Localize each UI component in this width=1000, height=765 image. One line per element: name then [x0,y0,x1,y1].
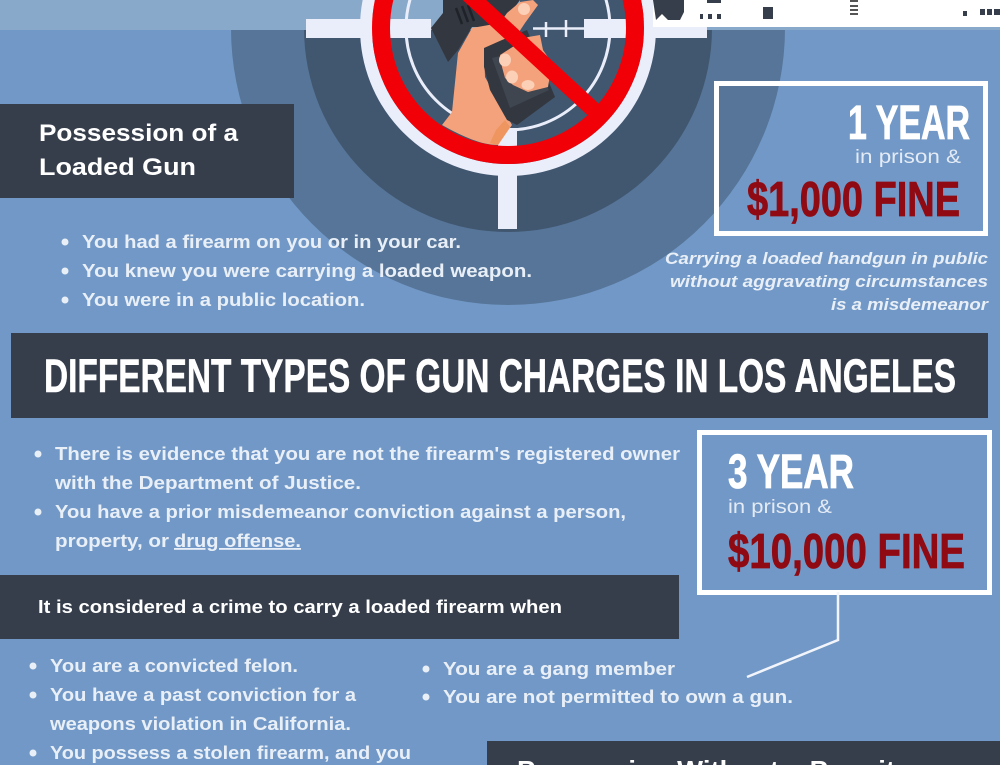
callout: 3 year penalty: in prison & [728,497,832,518]
icon: gun slide [431,0,520,62]
title banner [11,333,988,418]
icon: hand [442,0,538,145]
callout: 1 year penalty: in prison & [855,147,961,168]
callout: 1 year penalty [716,84,986,234]
text block: left conditions list: You are a convicted felon. [50,656,298,676]
panel: possession without a permit [487,741,1000,765]
text block: misdemeanor note: is a misdemeanor [831,295,990,314]
icon: fingers [500,35,552,92]
text block: misdemeanor note [665,249,990,314]
text block: evidence bullets: You have a prior misdemeanor conviction against a person, [55,502,626,522]
top band [0,0,1000,30]
callout: 3 year penalty: 3 YEAR [728,446,854,499]
text block: evidence bullets: drug offense. [174,531,301,551]
icon: wrist shadow [490,120,510,145]
panel: possession of a loaded gun: Loaded Gun [39,154,196,181]
text block: loaded gun bullets: You knew you were carrying a loaded weapon. [82,261,532,281]
text block: left conditions list: weapons violation in California. [49,714,351,734]
text block: evidence bullets: property, or [55,531,169,551]
icon: slide ridges [456,5,474,24]
text block: right conditions list: You are a gang member [443,659,675,679]
callout: 3 year penalty [700,432,990,592]
text block: evidence bullets: with the Department of Justice. [54,473,361,493]
text block: left conditions list: You have a past conviction for a [50,685,357,705]
target graphic: crosshair with crossed-out gun [0,0,1000,305]
text block: right conditions list [422,659,793,707]
panel: crime condition bar [0,575,679,639]
text block: loaded gun bullets: You had a firearm on you or in your car. [82,232,461,252]
text block: evidence bullets: There is evidence that you are not the firearm's registered owner [55,444,680,464]
icon: gun grip [484,30,555,125]
panel: possession of a loaded gun: Possession of a [39,120,239,147]
text block: left conditions list [30,656,411,763]
text block: misdemeanor note: Carrying a loaded handgun in public [665,249,989,268]
panel: possession of a loaded gun [0,104,294,198]
text block: right conditions list: You are not permitted to own a gun. [443,687,793,707]
text block: loaded gun bullets: You were in a public location. [82,290,365,310]
text block: evidence bullets [34,444,680,551]
arrow: callout connector [747,592,838,677]
skyline strip [653,0,1000,27]
text block: misdemeanor note: without aggravating circumstances [670,272,988,291]
panel: crime condition bar: It is considered a crime to carry a loaded firearm when [38,597,562,617]
text block: loaded gun bullets [62,232,532,310]
text block: left conditions list: You possess a stolen firearm, and you [50,743,411,763]
icon: gun sight ticks [533,20,585,37]
icon: prohibition sign [381,0,635,155]
